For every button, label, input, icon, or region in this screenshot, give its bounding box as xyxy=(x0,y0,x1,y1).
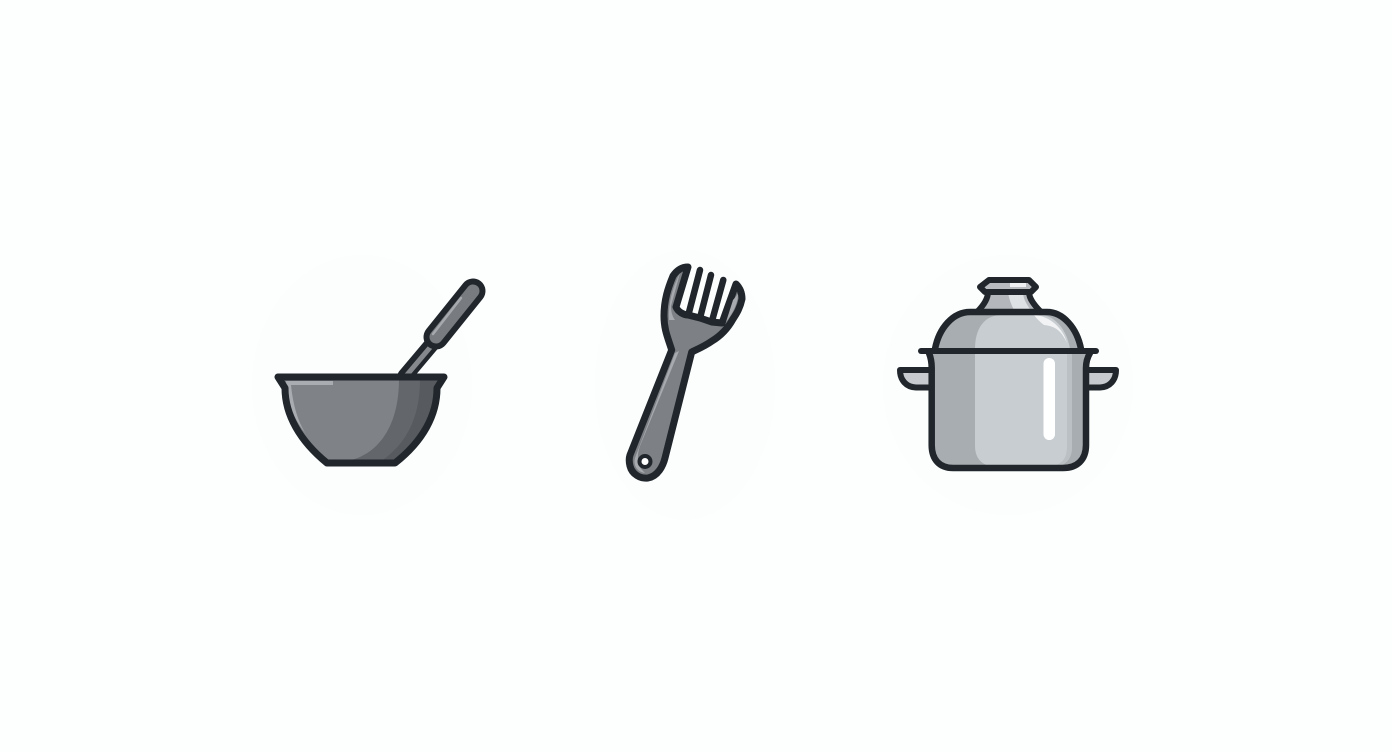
bowl body xyxy=(278,377,444,463)
fork highlights xyxy=(634,351,679,473)
pot highlight xyxy=(1044,358,1055,440)
icon: cooking pot with lid xyxy=(900,280,1116,468)
pot body xyxy=(929,353,1090,468)
fork hanging hole xyxy=(640,456,650,467)
lid knob xyxy=(980,280,1036,292)
icon: mixing bowl with spoon xyxy=(278,291,473,463)
fork body xyxy=(629,267,742,478)
spoon handle xyxy=(433,291,473,337)
spoon stem xyxy=(405,344,433,376)
fork tines xyxy=(688,270,723,322)
icon: spatula fork xyxy=(629,267,742,478)
pot handles xyxy=(900,370,1116,388)
lid rim xyxy=(921,348,1096,354)
lid dome xyxy=(935,312,1081,349)
lid neck xyxy=(977,292,1041,312)
